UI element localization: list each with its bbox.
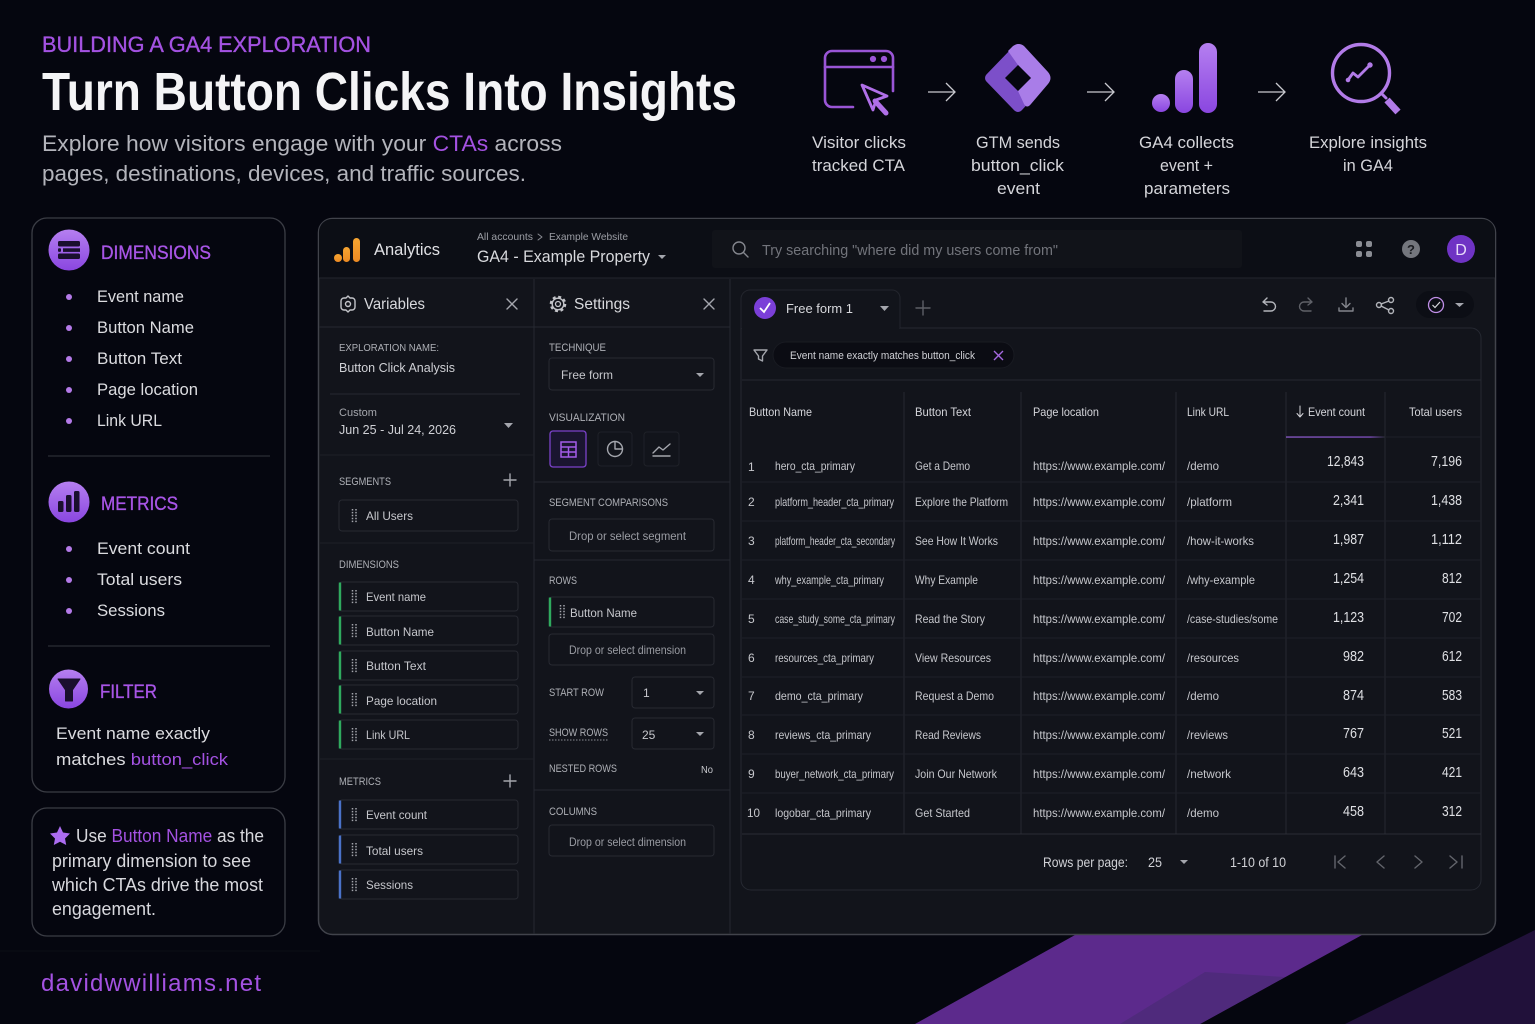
table header <box>749 405 1462 419</box>
list: metrics: Total users <box>97 570 182 589</box>
technique: TECHNIQUE <box>549 342 606 354</box>
icon: metrics <box>48 482 90 522</box>
list: dimensions <box>66 287 198 430</box>
close <box>704 299 714 309</box>
row 10: 458 <box>1343 804 1364 820</box>
list: dimensions: Event name <box>97 287 184 306</box>
row 9: 9 <box>748 767 755 781</box>
row 8: /reviews <box>1187 728 1228 742</box>
step 1 label <box>812 133 906 175</box>
row 10: Get Started <box>915 806 970 820</box>
sort underline <box>1286 436 1385 438</box>
header <box>42 32 737 186</box>
row 3: platform_header_cta_secondary <box>775 534 895 548</box>
step 3 label <box>1139 133 1234 198</box>
row 2: https://www.example.com/ <box>1033 495 1166 509</box>
panel: tip <box>32 808 285 936</box>
settings heading: Settings <box>574 296 630 313</box>
row 4: 4 <box>748 573 755 587</box>
filter bar: Event name exactly matches button_click <box>790 350 975 362</box>
row 6: resources_cta_primary <box>775 651 874 665</box>
list: dimensions: Page location <box>97 380 198 399</box>
row 7 <box>748 688 1462 704</box>
tab: Free form 1 <box>786 301 853 316</box>
row 3: https://www.example.com/ <box>1033 534 1166 548</box>
row 9: 643 <box>1343 765 1364 781</box>
metrics list: Total users <box>366 844 423 858</box>
step 3 label: parameters <box>1144 179 1230 198</box>
icon: browser with cursor <box>825 51 893 113</box>
pagination <box>1043 854 1462 870</box>
exploration name: Button Click Analysis <box>339 361 455 375</box>
row 8: https://www.example.com/ <box>1033 728 1166 742</box>
add tab <box>916 301 930 315</box>
row 3 <box>748 532 1462 548</box>
eyebrow: BUILDING A GA4 EXPLORATION <box>42 32 371 57</box>
table header: Link URL <box>1187 405 1229 419</box>
row 5: 702 <box>1442 610 1462 626</box>
dimensions list: DIMENSIONS <box>339 559 399 571</box>
row 8: 521 <box>1442 726 1462 742</box>
row 9: buyer_network_cta_primary <box>775 767 894 781</box>
breadcrumb: Example Website <box>549 231 628 243</box>
date range: Custom <box>339 407 377 419</box>
row 10: logobar_cta_primary <box>775 806 871 820</box>
row 7: 874 <box>1343 688 1364 704</box>
title: Turn Button Clicks Into Insights <box>42 62 737 122</box>
row 2: 2,341 <box>1333 493 1364 509</box>
columns: COLUMNS <box>549 806 597 818</box>
icon: magnifier with trend <box>1332 44 1398 112</box>
row 6: https://www.example.com/ <box>1033 651 1166 665</box>
app frame <box>318 218 1496 934</box>
table header: Total users <box>1409 405 1462 419</box>
row 1: hero_cta_primary <box>775 459 855 473</box>
row 4: https://www.example.com/ <box>1033 573 1166 587</box>
footer url: davidwwilliams.net <box>41 970 261 997</box>
row 10: /demo <box>1187 806 1219 820</box>
heading: dimensions: DIMENSIONS <box>101 243 211 264</box>
row 1: Get a Demo <box>915 459 970 473</box>
segment comparisons: SEGMENT COMPARISONS <box>549 497 668 509</box>
pagination: 1-10 of 10 <box>1230 854 1286 870</box>
dimensions list: Button Text <box>366 659 427 673</box>
search box: Try searching "where did my users come from" <box>762 243 1058 259</box>
step 2 label <box>971 133 1065 198</box>
rows: Button Name <box>570 606 637 620</box>
rows: ROWS <box>549 575 577 587</box>
row 7: Request a Demo <box>915 689 994 703</box>
row 2: platform_header_cta_primary <box>775 495 894 509</box>
pagination: 25 <box>1148 854 1162 870</box>
panel border <box>32 218 285 792</box>
row 4: 1,254 <box>1333 571 1364 587</box>
segments: All Users <box>366 509 413 523</box>
breadcrumb <box>477 231 628 243</box>
date range: Jun 25 - Jul 24, 2026 <box>339 423 456 437</box>
heading: filter: FILTER <box>100 682 157 703</box>
table grid <box>742 392 1481 834</box>
row 5: 5 <box>748 612 755 626</box>
icon: analytics bars <box>1152 43 1217 113</box>
row 3: /how-it-works <box>1187 534 1254 548</box>
list: dimensions: Button Text <box>97 349 182 368</box>
row 6: 982 <box>1343 649 1364 665</box>
start row <box>549 677 714 708</box>
nested rows: No <box>701 764 713 776</box>
background purple band <box>915 935 1362 1024</box>
process flow <box>812 43 1427 198</box>
dimensions list: Button Name <box>366 625 434 639</box>
columns: Drop or select dimension <box>569 835 686 849</box>
toolbar icons <box>1263 298 1394 314</box>
columns <box>549 806 714 856</box>
row 9: /network <box>1187 767 1232 781</box>
row 6: /resources <box>1187 651 1239 665</box>
tip text: engagement. <box>52 899 156 919</box>
panel: report <box>741 290 1481 890</box>
step 2 label: GTM sends <box>976 133 1060 152</box>
start row: 1 <box>643 686 650 700</box>
step 2 label: event <box>997 179 1040 198</box>
avatar: D <box>1455 242 1467 259</box>
segment comparisons <box>549 497 714 551</box>
row 5: 1,123 <box>1333 610 1364 626</box>
row 8: 767 <box>1343 726 1364 742</box>
row 6 <box>748 649 1462 665</box>
metrics list: Sessions <box>366 878 413 892</box>
rows: Drop or select dimension <box>569 643 686 657</box>
row 7: 583 <box>1442 688 1462 704</box>
row 1: /demo <box>1187 459 1219 473</box>
icon: tag manager diamond <box>990 44 1050 107</box>
panel: variables <box>319 279 534 934</box>
filter value: matches button_click <box>56 750 229 769</box>
row 2: 1,438 <box>1431 493 1462 509</box>
step 3 label: GA4 collects <box>1139 133 1234 152</box>
technique: Free form <box>561 368 613 382</box>
row 4: Why Example <box>915 573 978 587</box>
metrics list: METRICS <box>339 776 381 788</box>
panel: analytics app <box>318 218 1496 934</box>
row 9 <box>748 765 1462 781</box>
exploration name <box>339 343 455 375</box>
technique <box>549 342 714 390</box>
row 2 <box>748 493 1462 509</box>
report card <box>741 328 1481 890</box>
row 2: 2 <box>748 495 755 509</box>
heading: metrics: METRICS <box>101 494 178 515</box>
row 10: https://www.example.com/ <box>1033 806 1166 820</box>
row 10: 312 <box>1442 804 1462 820</box>
table header: Page location <box>1033 405 1099 419</box>
icon: dimensions <box>48 230 90 270</box>
tab <box>741 290 900 328</box>
row 8 <box>748 726 1462 742</box>
filter bar <box>754 342 1014 368</box>
row 5: /case-studies/some <box>1187 612 1278 626</box>
subtitle: Explore how visitors engage with your CTAs across <box>42 131 562 156</box>
table header: Event count <box>1308 405 1366 419</box>
row 10 <box>747 804 1462 820</box>
list: metrics <box>66 539 190 620</box>
row 6: 6 <box>748 651 755 665</box>
row 7: https://www.example.com/ <box>1033 689 1166 703</box>
visualization: VISUALIZATION <box>549 412 625 424</box>
row 3: 1,987 <box>1333 532 1364 548</box>
breadcrumb: All accounts <box>477 231 533 243</box>
list: metrics: Event count <box>97 539 190 558</box>
row 1: 7,196 <box>1431 454 1462 470</box>
metrics list: Event count <box>366 808 428 822</box>
segments: SEGMENTS <box>339 476 391 488</box>
row 5 <box>748 610 1462 626</box>
product name: Analytics <box>374 240 440 259</box>
tip text <box>51 826 264 919</box>
top bar <box>319 219 1495 278</box>
row 3: 3 <box>748 534 755 548</box>
row 2: Explore the Platform <box>915 495 1008 509</box>
show rows: SHOW ROWS <box>549 727 608 739</box>
list: dimensions: Link URL <box>97 411 162 430</box>
row 4: why_example_cta_primary <box>774 573 884 587</box>
icon: help: ? <box>1407 242 1415 257</box>
row 1: 12,843 <box>1327 454 1364 470</box>
icon: star <box>50 826 70 845</box>
icon: settings gear <box>551 297 565 311</box>
row 4 <box>748 571 1462 587</box>
row 9: 421 <box>1442 765 1462 781</box>
start row: START ROW <box>549 687 605 699</box>
tip text: which CTAs drive the most <box>51 875 263 895</box>
row 1: https://www.example.com/ <box>1033 459 1166 473</box>
row 9: https://www.example.com/ <box>1033 767 1166 781</box>
panel: dimensions metrics filter <box>32 218 285 792</box>
step 3 label: event + <box>1160 156 1213 175</box>
variables heading: Variables <box>364 296 425 313</box>
row 9: Join Our Network <box>915 767 998 781</box>
row 3: See How It Works <box>915 534 998 548</box>
filter description: Event name exactly <box>56 724 211 743</box>
step 4 label: in GA4 <box>1343 156 1393 175</box>
segments <box>339 474 518 531</box>
row 6: 612 <box>1442 649 1462 665</box>
row 2: /platform <box>1187 495 1232 509</box>
step 4 label <box>1309 133 1427 175</box>
row 8: Read Reviews <box>915 728 981 742</box>
segment comparisons: Drop or select segment <box>569 529 687 543</box>
rows <box>549 575 714 665</box>
date range <box>339 407 513 437</box>
logo <box>334 238 360 262</box>
avatar <box>1447 235 1475 263</box>
metrics list <box>339 775 518 899</box>
pagination: Rows per page: <box>1043 854 1128 870</box>
status pill <box>1416 291 1474 318</box>
step 1 label: Visitor clicks <box>812 133 906 152</box>
search box <box>712 230 1242 268</box>
row 8: reviews_cta_primary <box>775 728 871 742</box>
show rows <box>549 718 714 749</box>
row 4: /why-example <box>1187 573 1255 587</box>
list: metrics: Sessions <box>97 601 165 620</box>
dimensions list: Event name <box>366 590 426 604</box>
table header: Button Name <box>749 405 812 419</box>
row 5: Read the Story <box>915 612 985 626</box>
icon: apps grid <box>1356 241 1372 257</box>
list: dimensions: Button Name <box>97 318 194 337</box>
dimensions list <box>339 559 518 749</box>
tip text: Use Button Name as the <box>76 826 264 846</box>
property name: GA4 - Example Property <box>477 247 650 266</box>
background dark purple band <box>1345 930 1535 1024</box>
step 1 label: tracked CTA <box>812 156 906 175</box>
show rows: 25 <box>642 728 656 742</box>
table <box>742 392 1481 834</box>
caret <box>658 255 666 259</box>
row 10: 10 <box>747 806 760 820</box>
row 7: 7 <box>748 689 755 703</box>
arrow 3 <box>1258 83 1285 101</box>
row 5: case_study_some_cta_primary <box>775 612 895 626</box>
row 5: https://www.example.com/ <box>1033 612 1166 626</box>
row 8: 8 <box>748 728 755 742</box>
icon: filter <box>49 670 88 708</box>
icon: variables <box>341 296 355 312</box>
row 6: View Resources <box>915 651 991 665</box>
close <box>507 299 517 309</box>
panel: settings <box>534 279 730 934</box>
exploration name: EXPLORATION NAME: <box>339 343 439 354</box>
arrow 2 <box>1087 83 1114 101</box>
row 4: 812 <box>1442 571 1462 587</box>
row 7: demo_cta_primary <box>775 689 863 703</box>
step 2 label: button_click <box>971 156 1065 175</box>
row 3: 1,112 <box>1431 532 1462 548</box>
row 7: /demo <box>1187 689 1219 703</box>
dimensions list: Link URL <box>366 728 410 742</box>
step 4 label: Explore insights <box>1309 133 1427 152</box>
row 1 <box>748 454 1462 474</box>
subtitle line 2: pages, destinations, devices, and traffic sources. <box>42 161 526 186</box>
nested rows: NESTED ROWS <box>549 763 617 775</box>
nested rows <box>549 763 713 776</box>
icon: help <box>1402 240 1420 258</box>
visualization <box>549 412 679 467</box>
arrow 1 <box>928 83 955 101</box>
dimensions list: Page location <box>366 694 437 708</box>
row 1: 1 <box>748 460 755 474</box>
table header: Button Text <box>915 405 972 419</box>
tip text: primary dimension to see <box>52 851 251 871</box>
